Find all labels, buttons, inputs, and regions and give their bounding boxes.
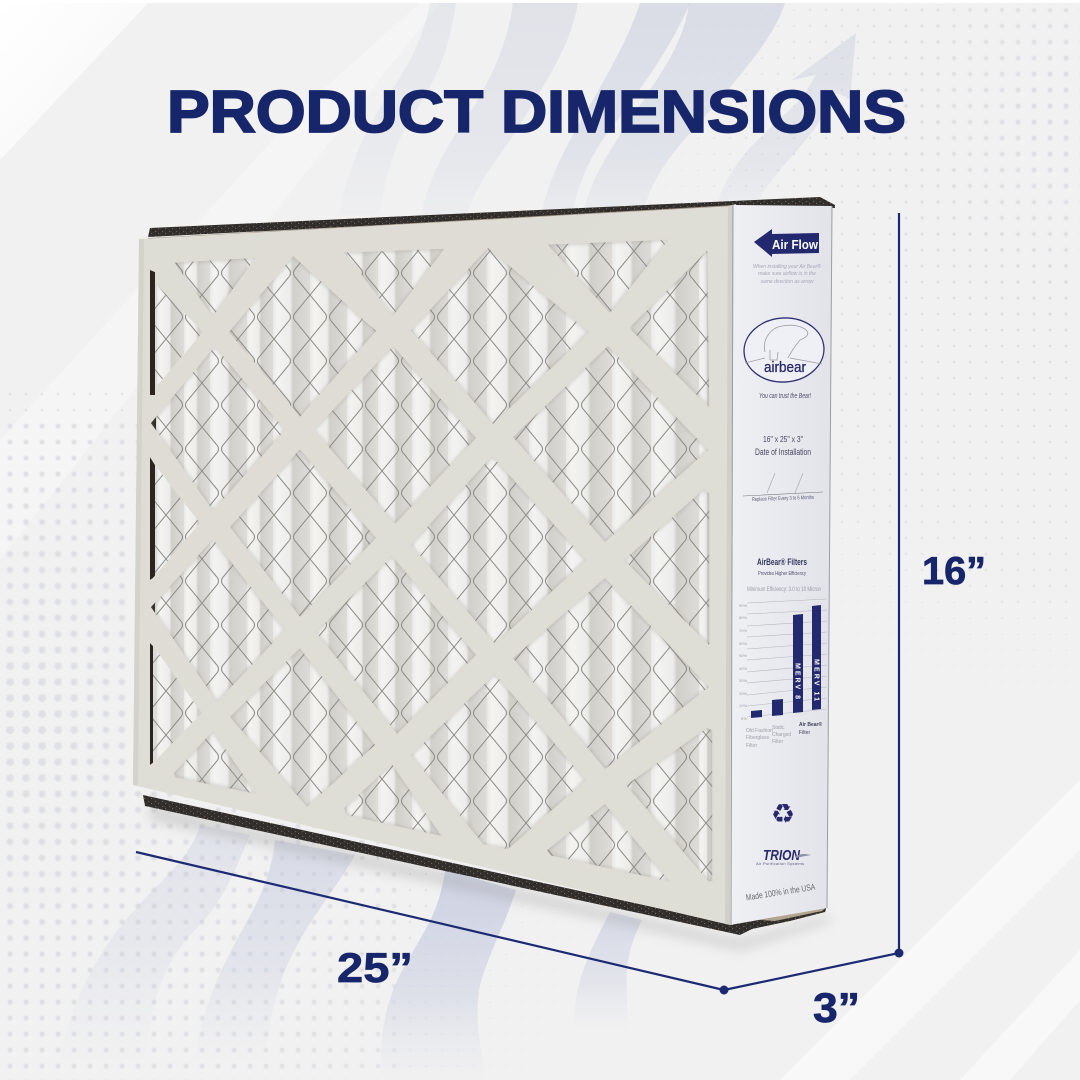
efficiency bar chart: MERV 8 (794, 663, 800, 699)
label: height 16 inches: 16” (922, 550, 986, 593)
side panel (730, 205, 832, 925)
chart category labels: Old Fashion (746, 728, 773, 734)
size and installation date: Date of Installation (755, 447, 811, 457)
airbear logo (742, 315, 826, 385)
floor shadow (150, 805, 830, 950)
label: depth 3 inches: 3” (813, 984, 860, 1031)
made in USA: Made 100% in the USA (745, 882, 816, 902)
air flow instructions: When installing your Air Bear® (753, 263, 821, 270)
icon: air flow arrow (754, 229, 819, 257)
icon: recycle: ♻ (771, 799, 795, 830)
size and installation date: 16" x 25" x 3" (763, 434, 803, 444)
air flow instructions (753, 263, 821, 285)
foam bottom edge (143, 795, 827, 935)
efficiency bar chart: 80% (739, 615, 747, 620)
dimension lines (136, 213, 904, 994)
efficiency bar chart: MERV 11 (812, 659, 820, 701)
efficiency bar chart: 0% (741, 716, 747, 721)
pleated filter media (140, 230, 730, 890)
air flow instructions: same direction as arrow (760, 279, 814, 285)
icon: air flow arrow: Air Flow (772, 237, 819, 252)
endpoint markers (720, 948, 904, 994)
efficiency bar chart: 70% (739, 628, 747, 633)
width line (136, 852, 724, 990)
chart category labels (746, 721, 822, 749)
airbear logo: airbear (764, 359, 806, 376)
decorative air-flow waves, bottom (60, 825, 642, 1080)
efficiency bar chart: 30% (739, 678, 747, 683)
efficiency chart heading: Provides Higher Efficiency (758, 571, 806, 577)
air flow instructions: make sure airflow is in the (758, 271, 816, 277)
depth line (724, 953, 899, 990)
TRION logo: TRION (763, 847, 801, 864)
label: width 25 inches: 25” (337, 944, 413, 991)
chart category labels: Charged (772, 732, 791, 738)
efficiency bar chart: 90% (739, 603, 747, 608)
replace filter note (743, 473, 823, 503)
chart category labels: Static (772, 725, 785, 731)
size and installation date (755, 434, 811, 457)
chart category labels: Filter (772, 739, 783, 745)
title: PRODUCT DIMENSIONS (167, 79, 906, 145)
efficiency chart heading (747, 557, 821, 593)
efficiency bar chart: 40% (739, 666, 747, 671)
efficiency bar chart: 20% (739, 691, 747, 696)
efficiency chart heading: AirBear® Filters (757, 557, 807, 568)
chart category labels: Air Bear® (799, 721, 822, 728)
chart category labels: Fiberglass (746, 735, 770, 741)
chart category labels: Filter (746, 743, 757, 749)
foam top edge (148, 197, 835, 240)
air filter product (133, 197, 835, 950)
efficiency bar chart (739, 599, 827, 721)
cardboard frame lattice (133, 204, 736, 925)
efficiency bar chart: 60% (739, 641, 747, 646)
TRION logo: Air Purification Systems (756, 861, 804, 866)
height line (898, 213, 900, 953)
efficiency bar chart: 50% (739, 653, 747, 658)
tagline: You can trust the Bear! (759, 391, 812, 400)
replace filter note: Replace Filter Every 3 to 6 Months (752, 495, 814, 503)
chart category labels: Filter (799, 730, 810, 736)
efficiency chart heading: Minimum Efficiency: 3.0 to 10 Micron (747, 587, 821, 593)
efficiency bar chart: 10% (739, 703, 747, 708)
decorative air-flow waves, top (340, 3, 856, 225)
